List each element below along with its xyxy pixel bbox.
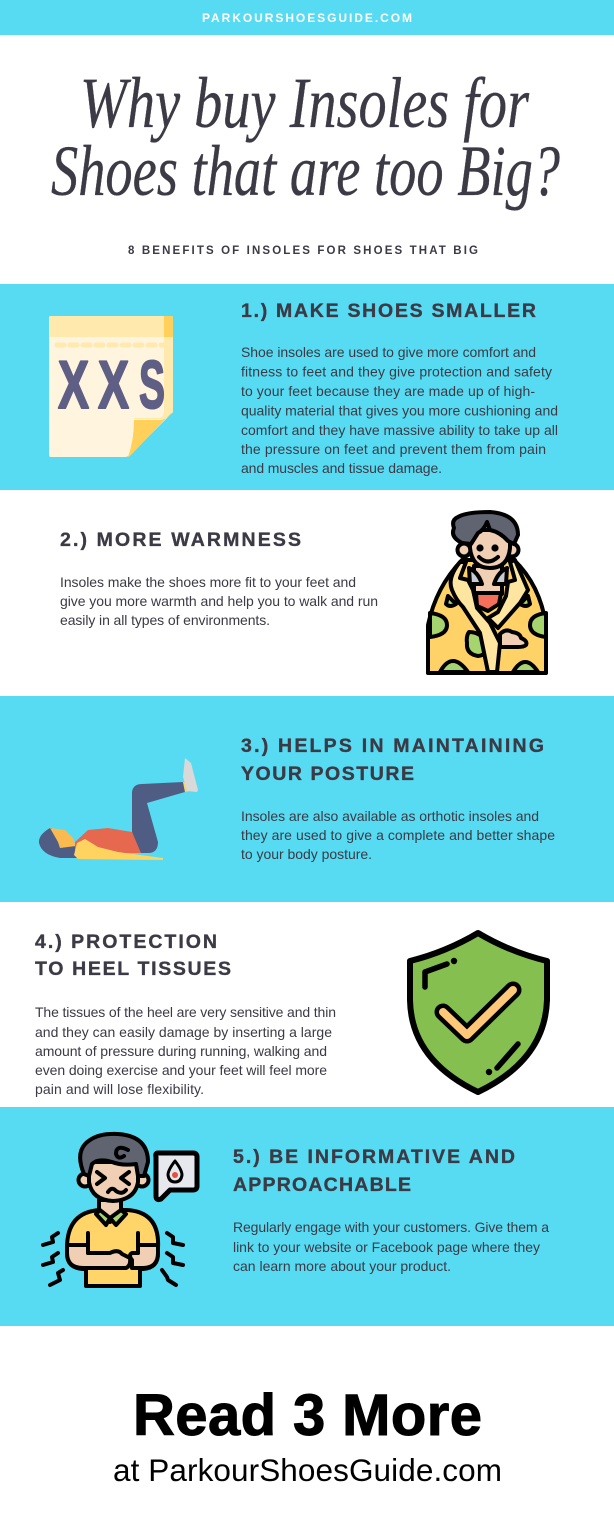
icon: XXS size tag: X <box>58 347 89 423</box>
body text: to your feet because they are made up of high- <box>241 383 535 399</box>
panel: helps in maintaining your posture <box>0 696 614 902</box>
icon: man in pain with speech bubble <box>43 1134 197 1286</box>
heading: 4.) PROTECTION <box>35 931 217 953</box>
icon: woman wrapped in blanket <box>428 512 546 673</box>
heading: 2.) MORE WARMNESS <box>60 529 301 551</box>
subtitle: 8 BENEFITS OF INSOLES FOR SHOES THAT BIG <box>128 245 478 257</box>
body text: can learn more about your product. <box>233 1258 451 1274</box>
panel: be informative and approachable <box>0 1107 614 1326</box>
panel: more warmness <box>60 512 546 673</box>
heading: APPROACHABLE <box>233 1174 411 1196</box>
heading: 5.) BE INFORMATIVE AND <box>233 1146 515 1168</box>
icon: XXS size tag: S <box>139 347 165 423</box>
body text <box>60 574 378 628</box>
body text <box>233 1219 549 1274</box>
call to action <box>113 1383 502 1488</box>
title <box>51 63 560 211</box>
top banner: PARKOURSHOESGUIDE.COM <box>202 11 412 25</box>
call to action: Read 3 More <box>133 1383 482 1448</box>
heading <box>241 735 544 785</box>
body text: comfort and they have massive ability to take up all <box>241 422 558 438</box>
heading <box>233 1146 515 1196</box>
heading: 3.) HELPS IN MAINTAINING <box>241 735 544 757</box>
heading: TO HEEL TISSUES <box>35 958 231 980</box>
body text: Shoe insoles are used to give more comfort and <box>241 344 536 360</box>
body text: even doing exercise and your feet will feel more <box>35 1062 327 1078</box>
panel: make shoes smaller <box>0 284 614 490</box>
body text: and they can easily damage by inserting a large <box>35 1024 332 1040</box>
body text: link to your website or Facebook page where they <box>233 1239 540 1255</box>
body text: fitness to feet and they give protection and safety <box>241 364 552 380</box>
icon: XXS size tag: X <box>98 347 129 423</box>
body text: Insoles are also available as orthotic insoles and <box>241 808 539 824</box>
body text <box>241 808 555 862</box>
body text: they are used to give a complete and better shape <box>241 827 555 843</box>
body text: Regularly engage with your customers. Give them a <box>233 1219 549 1235</box>
body text <box>35 1004 336 1097</box>
body text: to your body posture. <box>241 846 372 862</box>
body text: and muscles and tissue damage. <box>241 460 442 476</box>
icon: XXS size tag <box>49 316 173 457</box>
body text <box>241 344 558 476</box>
body text: pain and will lose flexibility. <box>35 1081 204 1097</box>
icon: person doing leg raise <box>39 758 198 860</box>
icon: shield with check mark <box>410 933 547 1092</box>
heading <box>35 931 231 980</box>
body text: quality material that gives you more cushioning and <box>241 402 558 418</box>
heading: YOUR POSTURE <box>241 763 414 785</box>
body text: The tissues of the heel are very sensitive and thin <box>35 1004 336 1020</box>
body text: give you more warmth and help you to walk and run <box>60 593 378 609</box>
body text: Insoles make the shoes more fit to your feet and <box>60 574 356 590</box>
body text: amount of pressure during running, walking and <box>35 1043 327 1059</box>
call to action: at ParkourShoesGuide.com <box>113 1452 502 1488</box>
top banner <box>0 0 614 35</box>
heading: 1.) MAKE SHOES SMALLER <box>241 300 536 322</box>
body text: easily in all types of environments. <box>60 612 270 628</box>
body text: the pressure on feet and prevent them from pain <box>241 441 546 457</box>
panel: protection to heel tissues <box>35 931 547 1097</box>
